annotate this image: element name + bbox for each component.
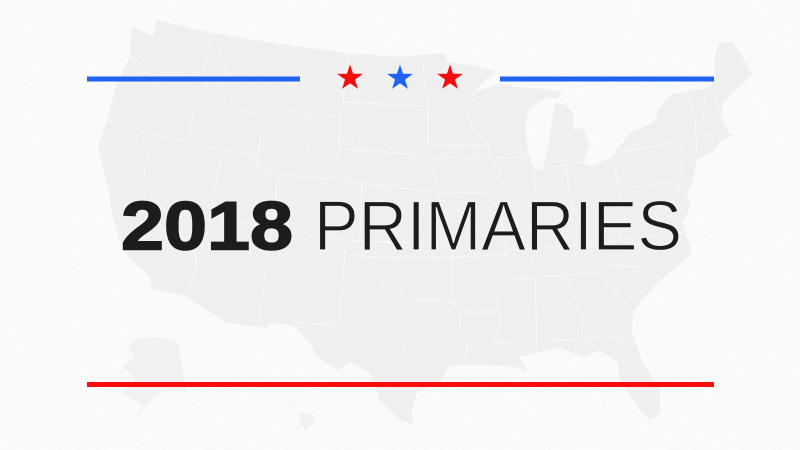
title: year: 2018 bbox=[121, 188, 293, 264]
top rule right bbox=[500, 76, 714, 82]
map of the United States bbox=[98, 20, 753, 430]
stars row bbox=[337, 64, 463, 89]
map: Hawaii bbox=[293, 401, 315, 430]
map: contiguous states bbox=[98, 20, 753, 425]
icon: blue star center bbox=[387, 64, 413, 89]
map: Alaska bbox=[123, 337, 187, 417]
title: word: PRIMARIES bbox=[314, 186, 682, 265]
map: state borders bbox=[107, 33, 722, 365]
bottom rule bbox=[87, 382, 714, 387]
icon: red star left bbox=[337, 64, 363, 89]
top rule left bbox=[87, 76, 300, 82]
icon: red star right bbox=[437, 64, 463, 89]
title bbox=[121, 186, 682, 265]
